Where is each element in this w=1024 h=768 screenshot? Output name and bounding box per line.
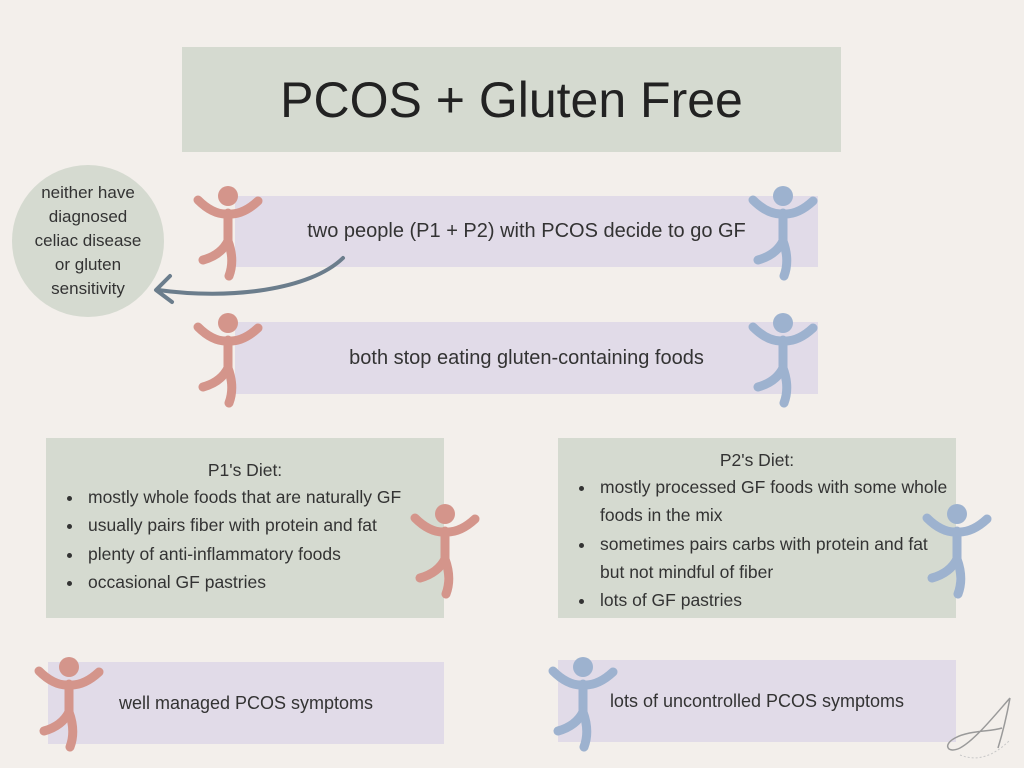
bar: well managed [48, 662, 444, 744]
title: PCOS + Gluten Free [280, 72, 743, 128]
logo [946, 698, 1011, 758]
bar: two people [235, 196, 818, 267]
panel: P1 diet: plenty of anti-inflammatory foods [88, 544, 341, 564]
panel: P1 diet: occasional GF pastries [88, 572, 266, 592]
icon: figure pink 2 [194, 313, 262, 408]
icon: figure pink bottom [34, 657, 104, 752]
panel: P1 diet: mostly whole foods that are naturally GF [88, 487, 401, 507]
panel: P2 diet: mostly processed GF foods with some whole foods in the mix [600, 477, 947, 525]
callout circle: neither have: celiac disease [35, 231, 141, 250]
panel: P1 diet: P1's Diet: [208, 460, 282, 480]
icon: figure blue bottom [548, 657, 618, 752]
bar: two people: two people (P1 + P2) with PCOS decide to go GF [307, 220, 746, 242]
callout circle: neither have: neither have [41, 183, 135, 202]
bar: uncontrolled [558, 660, 956, 742]
bar: uncontrolled: lots of uncontrolled PCOS symptoms [610, 690, 904, 710]
icon: figure blue P2 [922, 504, 992, 598]
panel: P2 diet: sometimes pairs carbs with protein and fat but not mindful of fiber [600, 534, 928, 582]
arrow [154, 256, 346, 304]
callout circle: neither have: or gluten [55, 255, 121, 274]
panel: P2 diet: lots of GF pastries [600, 590, 742, 610]
panel: P1 diet: usually pairs fiber with protein and fat [88, 515, 377, 535]
icon: figure pink P1 [410, 504, 480, 598]
icon: figure blue 2 [748, 313, 818, 408]
panel: P1 diet [46, 438, 444, 618]
panel: P2 diet: P2's Diet: [720, 450, 794, 470]
title [182, 47, 841, 152]
icon: figure blue 1 [748, 186, 818, 280]
callout circle: neither have: sensitivity [51, 279, 125, 298]
bar: both stop: both stop eating gluten-containing foods [349, 346, 704, 368]
bar: well managed: well managed PCOS symptoms [119, 692, 373, 712]
panel: P2 diet [558, 438, 956, 618]
icon: figure pink 1 [194, 186, 262, 280]
bar: both stop [235, 322, 818, 394]
callout circle: neither have [12, 165, 164, 317]
callout circle: neither have: diagnosed [49, 207, 127, 226]
